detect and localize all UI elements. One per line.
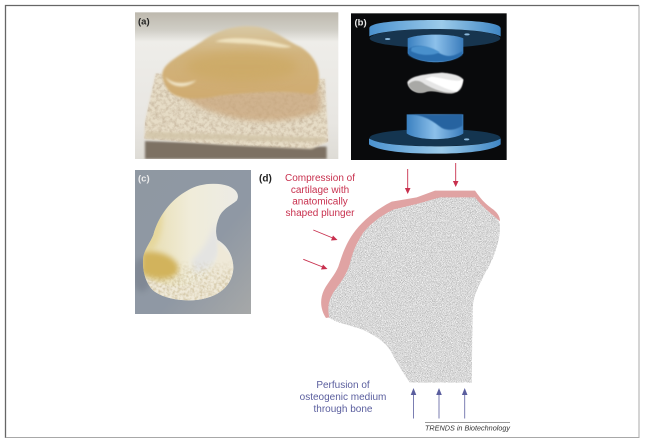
compression caption: shaped plunger [286,208,355,219]
compression caption: anatomically [292,196,348,208]
compression caption: Compression of [285,173,355,184]
lower plate [369,129,501,154]
lower plunger [407,114,463,139]
label (c): (c) [138,174,150,184]
perfusion caption: through bone [314,404,373,415]
panel c: photo of anatomically shaped bone scaffold [132,170,251,314]
label (d): (d) [259,174,272,184]
label (b): (b) [354,18,367,28]
speckled bone section [328,197,500,382]
panel d: schematic of bioreactor loading [259,163,510,432]
label (a): (a) [138,16,150,28]
perfusion caption [300,380,386,415]
dark reflection beneath the scaffold [145,141,327,159]
shadow at left of scaffold [135,259,148,291]
compression caption: cartilage with [291,185,349,196]
upper plunger [408,35,463,62]
scaffold shape [142,184,238,300]
top plate [369,20,501,48]
porous scaffold block [144,73,328,149]
panel a: photo of cartilage on bone scaffold [135,12,338,159]
compression caption [285,173,355,219]
perfusion caption: Perfusion of [316,380,370,391]
cartilage graft [407,73,463,93]
red compression arrows [303,163,458,270]
panel b: CAD model of plungers and cartilage [351,13,507,160]
perfusion caption: osteogenic medium [300,392,386,403]
cartilage layer [321,191,500,318]
translucent gel cartilage cap [162,26,319,99]
blue perfusion arrows [411,388,468,418]
credit line: TRENDS in Biotechnology [425,424,510,432]
